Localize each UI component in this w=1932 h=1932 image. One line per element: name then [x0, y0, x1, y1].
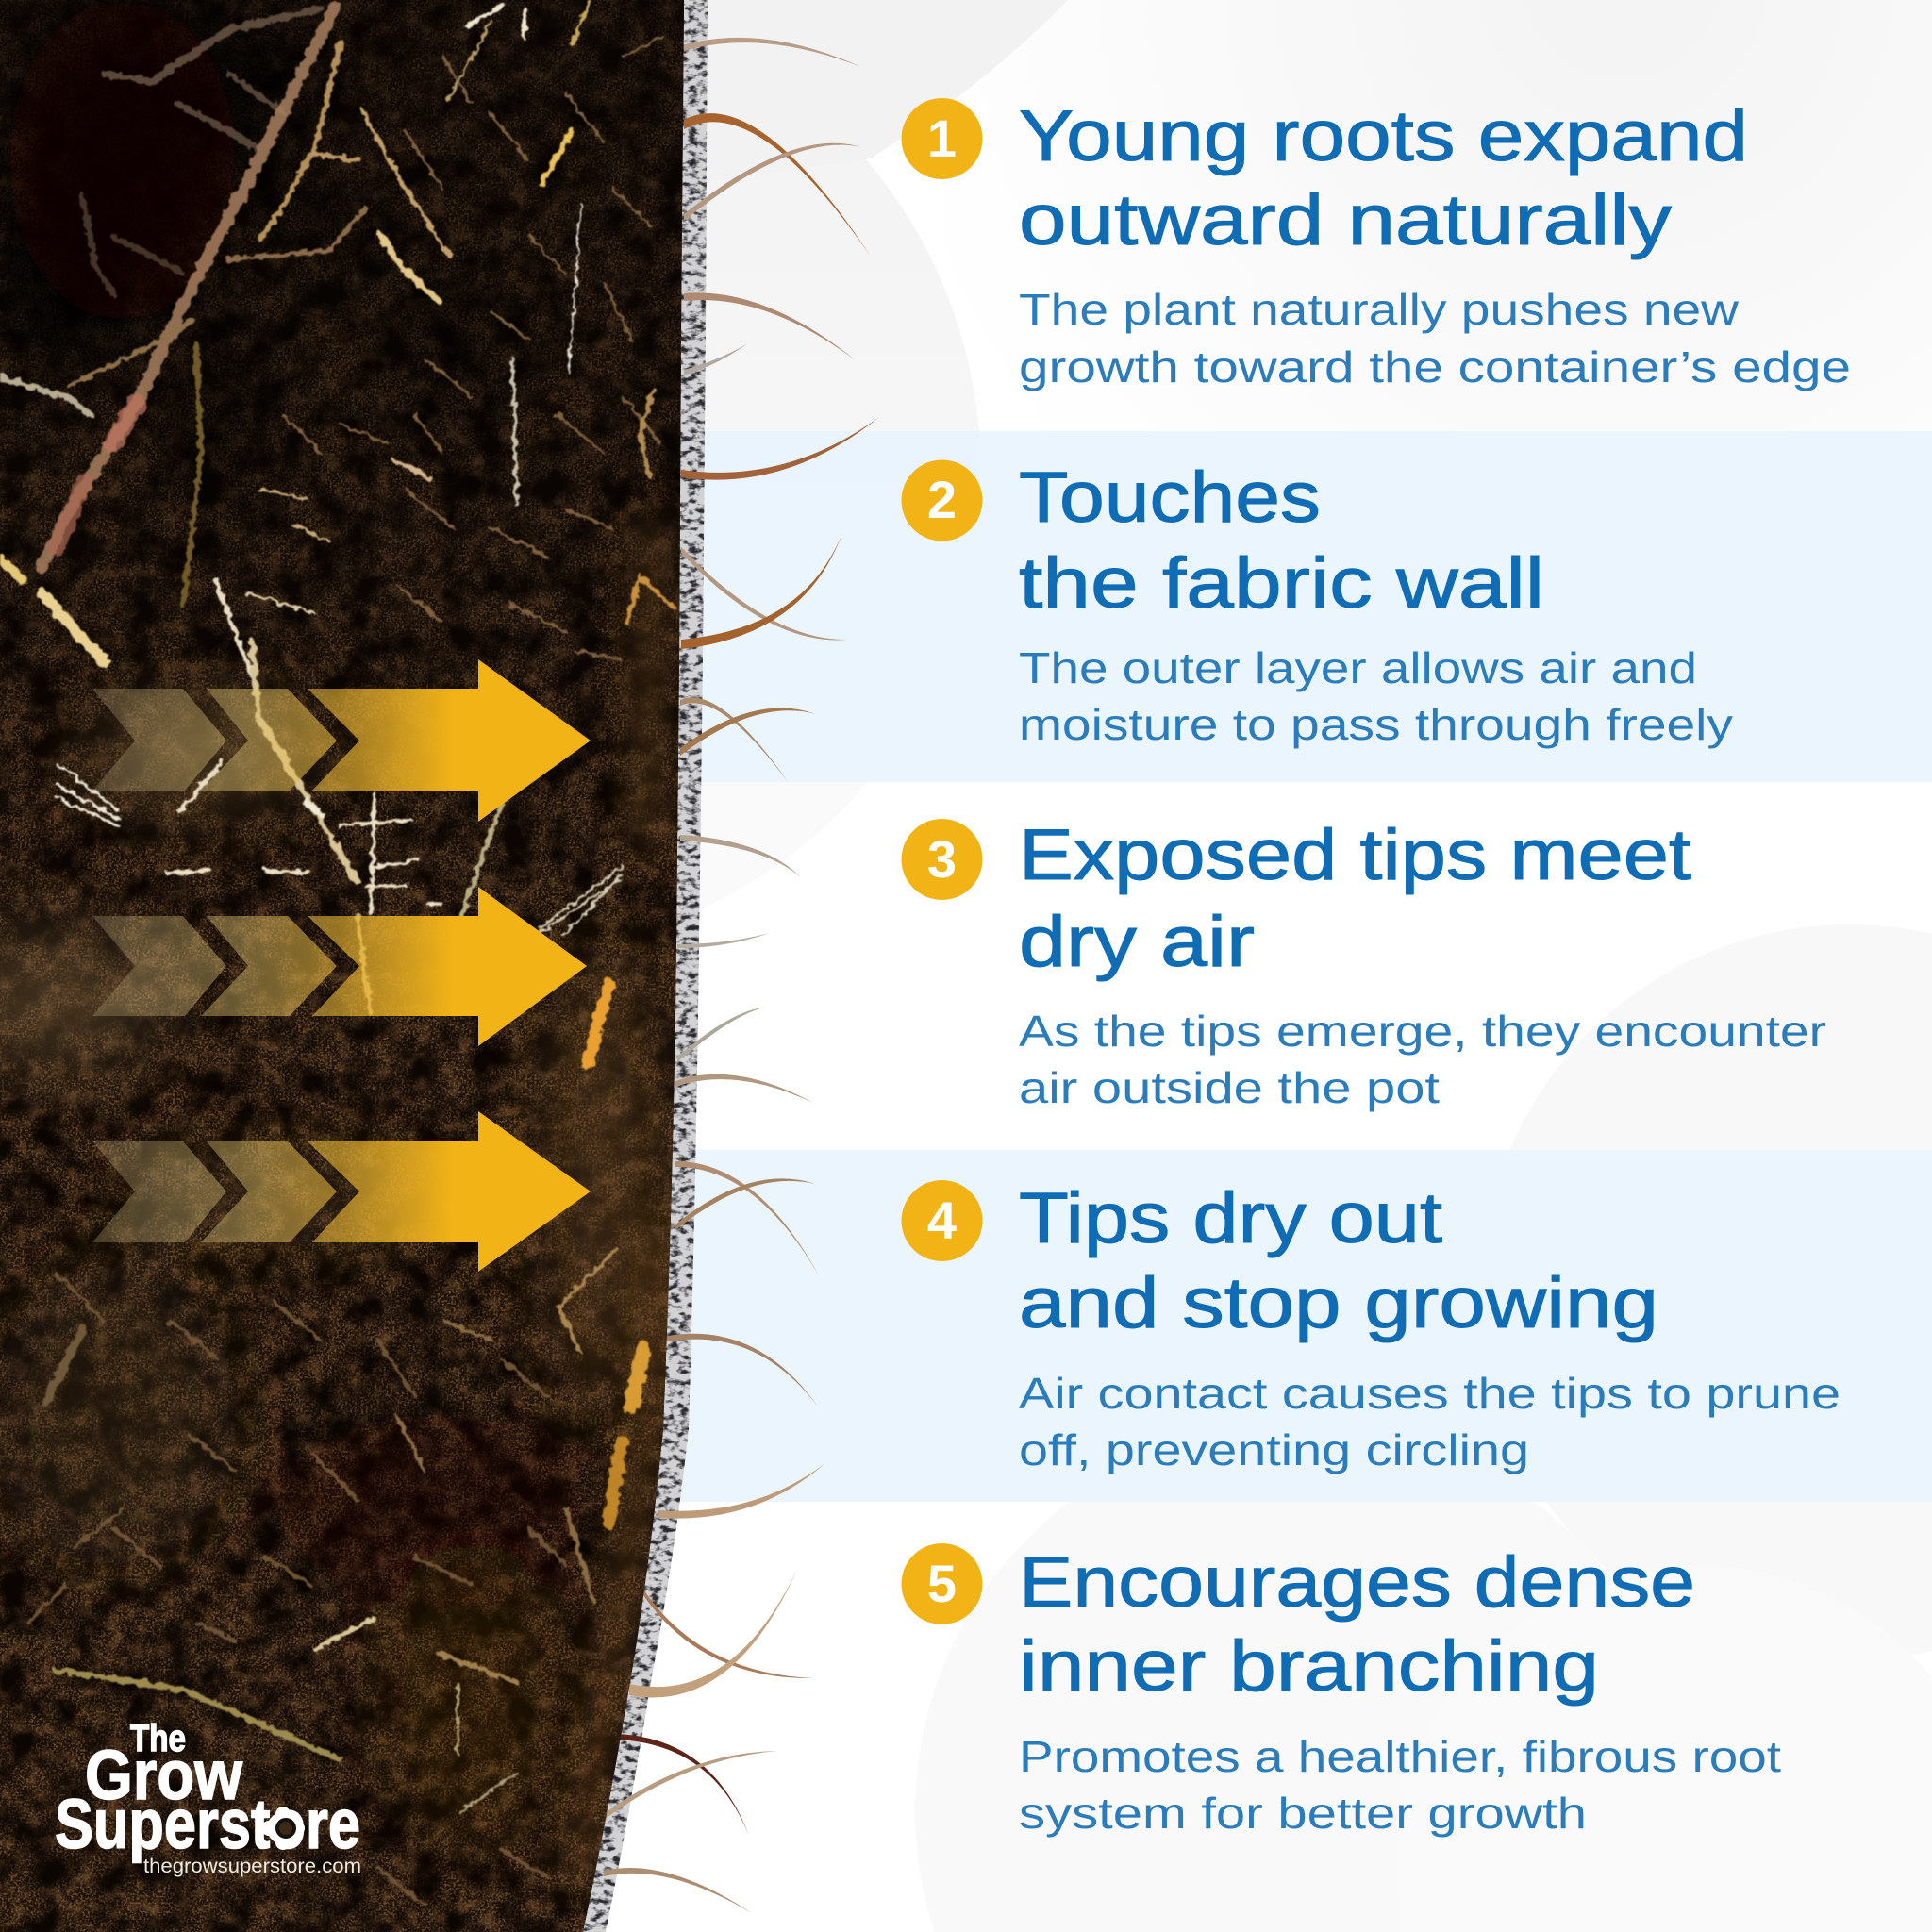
heading: step 3	[1019, 815, 1691, 982]
heading: step 3: Exposed tips meet	[1019, 815, 1691, 895]
heading: step 4: and stop growing	[1019, 1263, 1658, 1343]
icon: number badge 1: 1	[927, 108, 957, 168]
heading: step 5: inner branching	[1019, 1626, 1599, 1707]
text: step 3 description: As the tips emerge, they encounter	[1019, 1007, 1826, 1056]
arrow: lower yellow push arrow	[92, 1111, 591, 1272]
text: step 2 description: The outer layer allows air and	[1019, 643, 1697, 692]
text: step 4 description: Air contact causes the tips to prune	[1019, 1369, 1840, 1418]
icon: number badge 2: 2	[927, 470, 957, 529]
heading: step 5	[1019, 1542, 1695, 1707]
text: step 2 description: moisture to pass through freely	[1019, 700, 1733, 749]
heading: step 1	[1019, 96, 1748, 260]
text: step 2 description	[1019, 643, 1733, 749]
text: step 1 description	[1019, 285, 1851, 391]
heading: step 4: Tips dry out	[1019, 1178, 1442, 1258]
icon: number badge 5: 5	[927, 1554, 957, 1613]
text: step 1 description: growth toward the container’s edge	[1019, 342, 1851, 391]
step 3: exposed tips meet dry air	[902, 815, 1826, 1112]
heading: step 2	[1019, 458, 1544, 624]
heading: step 1: Young roots expand	[1019, 96, 1748, 176]
step 1: young roots expand	[902, 96, 1851, 391]
logo: The Grow Superstore: Grow	[85, 1736, 242, 1814]
icon: number badge 4: 4	[927, 1191, 957, 1250]
step 4: tips dry out and stop growing	[902, 1178, 1840, 1474]
panel: highlighted band for step 2	[660, 431, 1932, 782]
text: step 5 description: system for better growth	[1019, 1789, 1587, 1838]
heading: step 5: Encourages dense	[1019, 1542, 1695, 1623]
arrow: middle yellow push arrow	[92, 887, 587, 1046]
icon: number badge 3	[902, 819, 983, 900]
icon: number badge 5	[902, 1543, 983, 1624]
text: step 4 description	[1019, 1369, 1840, 1474]
photo: soil cross-section with roots	[0, 0, 717, 1932]
icon: number badge 1	[902, 98, 983, 179]
step 2: touches the fabric wall	[902, 458, 1733, 749]
roots growing through fabric wall	[604, 38, 879, 1913]
heading: step 3: dry air	[1019, 902, 1255, 982]
arrow: upper yellow push arrow	[92, 659, 591, 822]
text: step 5 description	[1019, 1732, 1781, 1838]
icon: number badge 3: 3	[927, 829, 957, 889]
heading: step 4	[1019, 1178, 1658, 1343]
text: step 4 description: off, preventing circling	[1019, 1425, 1529, 1474]
text: step 5 description: Promotes a healthier, fibrous root	[1019, 1732, 1781, 1781]
icon: number badge 4	[902, 1180, 983, 1261]
heading: step 2: the fabric wall	[1019, 543, 1544, 624]
text: step 3 description: air outside the pot	[1019, 1063, 1440, 1112]
heading: step 1: outward naturally	[1019, 180, 1672, 260]
logo: The Grow Superstore: The	[130, 1718, 186, 1759]
logo: The Grow Superstore: thegrowsuperstore.com	[143, 1856, 361, 1877]
text: step 3 description	[1019, 1007, 1826, 1112]
icon: number badge 2	[902, 460, 983, 541]
heading: step 2: Touches	[1019, 458, 1321, 538]
step 5: encourages dense inner branching	[902, 1542, 1781, 1838]
logo: The Grow Superstore: Superstore	[55, 1785, 360, 1863]
text: step 1 description: The plant naturally pushes new	[1019, 285, 1740, 334]
logo: The Grow Superstore	[55, 1718, 361, 1877]
panel: highlighted band for step 4	[660, 1150, 1932, 1502]
fabric pot wall	[583, 0, 708, 1932]
